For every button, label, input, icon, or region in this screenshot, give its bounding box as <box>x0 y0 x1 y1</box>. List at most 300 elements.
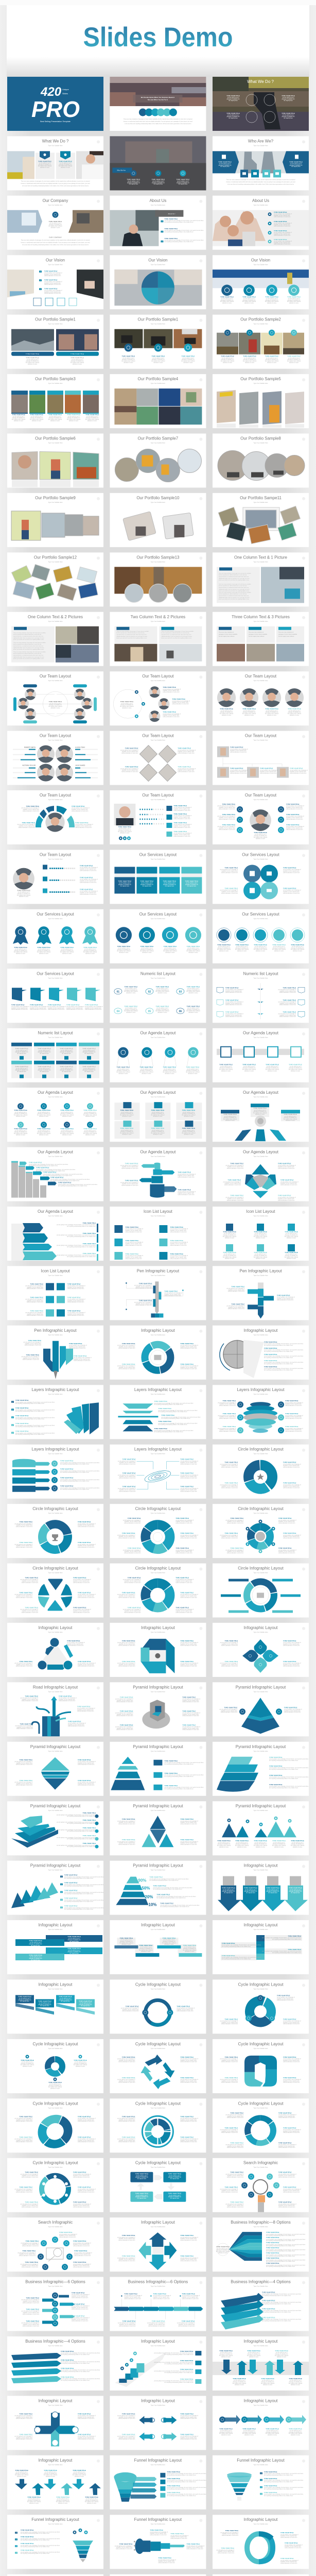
text panels: but the majority have suffered <box>278 636 294 637</box>
title: Our Portfolio Sample3 <box>35 377 76 381</box>
org chart <box>217 747 308 778</box>
labels <box>57 1222 98 1261</box>
labels <box>225 987 296 1018</box>
photos <box>56 626 99 663</box>
title: Pyramid Infographic Layout <box>133 1685 183 1689</box>
title: Circle Infographic Layout <box>238 1447 284 1452</box>
paragraph <box>226 179 295 185</box>
slide: Pyramid diamond <box>7 1742 103 1796</box>
slide: Road Infographic <box>7 1682 103 1736</box>
arrows <box>221 2360 303 2375</box>
slide: Our Portfolio Sample7 <box>110 434 206 487</box>
arrows <box>139 2416 177 2441</box>
title: Layers Infographic Layout <box>31 1387 79 1392</box>
slide: Our Vision checklist <box>7 255 103 309</box>
labels <box>264 1341 304 1371</box>
ring <box>245 1995 275 2026</box>
title: Our Team Layout <box>40 674 72 679</box>
labels <box>220 2112 301 2148</box>
list <box>268 211 292 245</box>
profile <box>114 804 135 840</box>
slide: Our Services columns <box>110 850 206 904</box>
feature icons <box>130 170 186 176</box>
folded cards <box>15 1995 95 2014</box>
arc <box>113 689 145 718</box>
labels <box>21 2292 90 2327</box>
circles <box>243 865 278 900</box>
slide: Our Portfolio Sample13 <box>110 552 206 606</box>
roads <box>32 1696 71 1736</box>
title: Infographic Layout <box>244 1923 278 1927</box>
title: Cycle Infographic Layout <box>238 2042 284 2046</box>
rising blocks <box>115 2351 166 2387</box>
donut <box>42 1524 68 1550</box>
title: Infographic Layout <box>39 1625 73 1630</box>
labels <box>266 2231 306 2267</box>
arrow chain <box>114 2295 203 2319</box>
title: Our Portfolio Sample12 <box>34 555 77 560</box>
icons <box>237 806 284 833</box>
slide: Our Agenda percent arrows <box>7 1207 103 1261</box>
title: Our Vision <box>251 258 270 262</box>
labels <box>219 2350 303 2386</box>
photo <box>114 269 202 306</box>
labels <box>121 2005 195 2012</box>
title: Our Team Layout <box>245 674 277 679</box>
numbered ovals: 03 <box>179 990 182 993</box>
labels <box>126 1282 184 1310</box>
triangles <box>142 1816 173 1847</box>
labels <box>14 2115 96 2143</box>
title: Infographic Layout <box>244 2517 278 2522</box>
box text <box>135 2173 181 2199</box>
title: Business Infographic—6 Options <box>25 2279 85 2284</box>
donut <box>146 1524 170 1549</box>
labels <box>120 748 196 772</box>
portrait <box>13 868 34 897</box>
cover text <box>31 85 80 123</box>
slide: cover 420 Unique Slides PRO <box>7 77 103 131</box>
team photos <box>17 689 93 720</box>
arrows <box>139 1164 177 1192</box>
title: Pyramid Infographic Layout <box>30 1744 81 1749</box>
text panels <box>217 626 304 643</box>
title: Infographic Layout <box>244 2339 278 2344</box>
labels <box>29 1162 98 1187</box>
labels <box>117 1343 198 1370</box>
spiral <box>144 1468 172 1484</box>
checklist <box>260 2471 304 2497</box>
title: Infographic Layout <box>244 1328 278 1333</box>
slide: Infographic band arrows <box>213 2336 309 2391</box>
city photo <box>110 77 206 106</box>
slide: Icon List six <box>213 1207 309 1261</box>
interlock <box>15 1935 102 1960</box>
property cards <box>11 391 99 414</box>
slide: Circle six petals <box>7 1563 103 1618</box>
axis and tags <box>217 983 305 1019</box>
skill bars: VICTORIA TAYLOR <box>22 765 36 767</box>
cards <box>114 1102 202 1139</box>
inner <box>251 2121 270 2140</box>
slide: Our Portfolio Sample2 <box>213 315 309 369</box>
slide: Pyramid percentages <box>110 1861 206 1915</box>
card text <box>15 1048 96 1073</box>
title: Pyramid Infographic Layout <box>236 1804 286 1808</box>
title: Our Agenda Layout <box>243 1150 279 1155</box>
ribbon badges <box>13 926 98 945</box>
buttons: TYPE YOUR TITLE <box>71 353 84 355</box>
tags <box>221 1579 301 1613</box>
slide: Our Team diamonds <box>110 731 206 785</box>
title: Our Services Layout <box>37 912 75 917</box>
labels <box>117 1577 198 1613</box>
title: Cycle Infographic Layout <box>135 1982 181 1987</box>
title: Our Agenda Layout <box>140 1031 176 1036</box>
labels <box>14 1759 96 1786</box>
diamond <box>41 1757 69 1790</box>
pyramid <box>241 1698 279 1734</box>
slide: Icon List centre <box>7 1266 103 1320</box>
title: Layers Infographic Layout <box>31 1447 79 1452</box>
cover text: Unique <box>62 88 69 91</box>
slide: Layers cylinders <box>7 1445 103 1499</box>
labels <box>14 1521 96 1548</box>
quadrant circle <box>142 272 174 304</box>
labels <box>17 2231 92 2268</box>
slide: Infographic globe <box>213 1326 309 1380</box>
title: Funnel Infographic Layout <box>134 2517 182 2522</box>
slide: Who We Are photo <box>110 136 206 190</box>
labels <box>222 1935 302 1960</box>
photos <box>114 329 202 348</box>
ring <box>26 2055 82 2081</box>
stack <box>150 1163 164 1198</box>
title: Who Are We? <box>248 139 274 143</box>
slide: One Column Text & 1 Picture <box>213 552 309 606</box>
title: Infographic Layout <box>141 2398 175 2403</box>
title: About Us <box>149 198 166 203</box>
slide: Our Portfolio Sample12 <box>7 552 103 606</box>
title: Infographic Layout <box>141 2220 175 2225</box>
pyramid <box>116 1877 148 1905</box>
slide: Pyramid isometric <box>110 1682 206 1736</box>
title: Numeric list Layout <box>38 1031 73 1036</box>
tab text <box>119 1937 197 1953</box>
numbered ovals: 06 <box>179 1010 182 1013</box>
slide: Our Portfolio Sample3 <box>7 374 103 428</box>
title: Icon List Layout <box>41 1268 70 1273</box>
title: Infographic Layout <box>141 1923 175 1927</box>
title: Our Team Layout <box>142 793 174 798</box>
slide: Our Services four circles <box>213 850 309 904</box>
labels <box>14 1577 96 1613</box>
list <box>160 2471 206 2498</box>
title: Pyramid Infographic Layout <box>133 1744 183 1749</box>
slide: Two Column Text & 2 Pictures <box>110 612 206 666</box>
labels <box>11 1004 103 1010</box>
circular photos <box>218 450 305 480</box>
text panel <box>11 626 55 663</box>
percentages <box>138 1878 156 1907</box>
title: Our Portfolio Sample2 <box>240 317 281 322</box>
photo <box>261 567 304 603</box>
title: Cycle Infographic Layout <box>135 2161 181 2165</box>
cover text: 420 <box>40 85 62 99</box>
title: Our Services Layout <box>139 912 177 917</box>
arrows <box>11 1161 57 1185</box>
tag and list <box>155 210 204 243</box>
slide: Circle six-section ring <box>110 1563 206 1618</box>
title: Our Team Layout <box>245 734 277 738</box>
title: Our Services Layout <box>242 912 280 917</box>
slide: Circle six sections <box>110 1504 206 1558</box>
labels <box>117 2115 198 2143</box>
pen <box>248 1282 274 1318</box>
title: Two Column Text & 2 Pictures <box>131 615 185 619</box>
title: Pen Infographic Layout <box>137 1268 180 1273</box>
slide: Pen Infographic one <box>110 1266 206 1320</box>
slide: Funnel percent <box>213 2455 309 2510</box>
title: Pyramid Infographic Layout <box>30 1863 81 1868</box>
slide: Cycle four arrows <box>110 2039 206 2093</box>
title: Circle Infographic Layout <box>135 1506 181 1511</box>
text panels: passages of Lorem Ipsum available <box>249 634 268 635</box>
title: Our Portfolio Sample7 <box>138 436 179 441</box>
photo mosaic <box>114 388 202 425</box>
slide: Search Infographic two <box>7 2217 103 2272</box>
title: Circle Infographic Layout <box>238 1506 284 1511</box>
buttons: TYPE YOUR TITLE <box>26 353 39 355</box>
title: Pen Infographic Layout <box>239 1268 282 1273</box>
title: Our Portfolio Sample13 <box>136 555 180 560</box>
title: Cycle Infographic Layout <box>135 2042 181 2046</box>
slide: Our Team portraits <box>213 671 309 725</box>
slide: Infographic plus shape <box>7 2396 103 2450</box>
text panels: There are many variations of <box>278 632 294 633</box>
tabs <box>114 1938 202 1957</box>
labels <box>118 1459 198 1492</box>
title: Numeric list Layout <box>243 971 278 976</box>
reflections <box>12 480 99 487</box>
title: Funnel Infographic Layout <box>31 2517 80 2522</box>
labels <box>118 2293 200 2327</box>
text panels: passages of Lorem Ipsum available <box>278 634 297 635</box>
labels <box>120 1163 196 1195</box>
slide: Pyramid triangles <box>110 1801 206 1855</box>
callouts <box>219 1706 302 1715</box>
text panel <box>217 567 260 603</box>
checklist <box>11 1399 55 1435</box>
paragraph <box>21 180 90 187</box>
captions <box>221 355 301 363</box>
labels <box>217 1840 305 1848</box>
arrows <box>141 2055 174 2089</box>
labels <box>115 1696 200 1731</box>
squares <box>221 1047 301 1057</box>
slide: Infographic hex options <box>7 2574 103 2576</box>
column text <box>118 880 198 887</box>
slide: Pyramid five peaks <box>213 1801 309 1855</box>
cross arrows <box>138 2232 177 2270</box>
slide: Layers hourglass <box>110 1385 206 1439</box>
text panels: There are many variations of <box>219 632 234 633</box>
labels <box>21 1340 92 1362</box>
slide: Business 4 Options slanted <box>213 2277 309 2331</box>
squares <box>114 1225 167 1260</box>
photos and cards <box>7 151 103 179</box>
funnel <box>73 2529 93 2562</box>
slide: Our Agenda band <box>213 1028 309 1082</box>
slide: Our Team hub <box>7 671 103 725</box>
labels <box>117 2056 198 2083</box>
band <box>217 1049 304 1055</box>
slide: Infographic interlock <box>7 1920 103 1974</box>
labels <box>60 1460 100 1490</box>
labels <box>219 1064 303 1072</box>
photo details <box>227 471 284 477</box>
title: Our Services Layout <box>139 852 177 857</box>
magnifier <box>253 2180 268 2212</box>
triangle <box>37 1638 73 1670</box>
title: Our Portfolio Sample9 <box>35 496 76 500</box>
target and arrows <box>235 1115 286 1141</box>
slide: Business 6 Options arrow chain <box>110 2277 206 2331</box>
tag and list: About Us ! <box>168 213 175 215</box>
photo tones <box>213 77 309 131</box>
slide: Cycle three arrows <box>213 1979 309 2033</box>
columns <box>114 867 202 893</box>
slide: Cycle rounded square <box>213 2039 309 2093</box>
labels <box>117 1818 198 1845</box>
slide: Our Services ribbons <box>7 909 103 963</box>
slide: Pyramid isometric steps <box>7 1801 103 1855</box>
captions <box>220 708 302 716</box>
hourglass <box>118 1403 158 1431</box>
card text <box>120 1109 196 1136</box>
title: Our Team Layout <box>142 674 174 679</box>
slide: Numeric list cards <box>7 1028 103 1082</box>
title: Infographic Layout <box>39 1982 73 1987</box>
title: Circle Infographic Layout <box>135 1566 181 1570</box>
diamonds <box>139 745 176 782</box>
numbered ovals: 01 <box>117 990 119 993</box>
slide: Our Team skills <box>7 731 103 785</box>
star cube <box>245 1164 276 1198</box>
slide: Infographic ribbon ring <box>213 2515 309 2569</box>
slide: Funnel layered <box>110 2455 206 2510</box>
photo collage <box>218 506 300 544</box>
title: What We Do ? <box>247 79 274 84</box>
labels <box>125 1226 188 1260</box>
title: What We Do ? <box>42 139 69 143</box>
name tags <box>13 684 97 723</box>
title: Our Team Layout <box>142 734 174 738</box>
title: Cycle Infographic Layout <box>238 1982 284 1987</box>
labels <box>220 1640 301 1667</box>
title: Pen Infographic Layout <box>34 1328 77 1333</box>
title: Cycle Infographic Layout <box>135 2101 181 2106</box>
book fan <box>64 1402 99 1434</box>
slide: Our Agenda target arrows <box>213 1088 309 1142</box>
checklist <box>39 270 62 294</box>
percentages: 20% <box>145 1895 153 1900</box>
connectors <box>136 1462 179 1489</box>
title: Cycle Infographic Layout <box>32 2042 78 2046</box>
slide: Infographic percent tabs <box>110 1920 206 1974</box>
slide: Infographic four leaves <box>213 1623 309 1677</box>
slide: Funnel icons <box>7 2515 103 2569</box>
title: Infographic Layout <box>39 1923 73 1927</box>
slide: Infographic cross arrows <box>110 2217 206 2272</box>
slide: Search Infographic one <box>213 2158 309 2212</box>
labels <box>14 946 97 954</box>
photos <box>7 269 103 299</box>
slide: Cycle ring two <box>110 1979 206 2033</box>
title: Our Portfolio Sample1 <box>138 317 179 322</box>
title: Infographic Layout <box>39 2458 73 2463</box>
title: Funnel Infographic Layout <box>134 2458 182 2463</box>
numbered ovals: 05 <box>148 1010 151 1013</box>
slide: Our Portfolio Sample5 <box>213 374 309 428</box>
labels <box>220 2172 301 2208</box>
slide: Our Portfolio Sample8 <box>213 434 309 487</box>
portrait <box>250 809 271 840</box>
labels <box>124 986 200 1013</box>
labels <box>117 2234 198 2262</box>
slide: Pyramid mountains <box>7 1861 104 1915</box>
title: Our Portfolio Sample4 <box>138 377 179 381</box>
slide: Cycle ring icons <box>7 2039 103 2093</box>
title: Numeric list Layout <box>141 971 176 976</box>
cylinders <box>12 1459 36 1492</box>
circular photos <box>125 584 191 602</box>
captions <box>26 357 84 365</box>
dial <box>145 1345 170 1370</box>
title: Search Infographic <box>243 2161 278 2165</box>
ring <box>142 2000 173 2025</box>
ring <box>247 2534 273 2562</box>
title: Business Infographic—4 Options <box>25 2339 85 2344</box>
slide: Cycle four boxes <box>110 2158 206 2212</box>
title: Our Services Layout <box>37 971 75 976</box>
slide: Circle donut three <box>213 1445 309 1499</box>
labels <box>116 1066 200 1074</box>
stack <box>111 1757 145 1790</box>
labels <box>14 1109 97 1136</box>
feature text <box>127 178 189 185</box>
icons and labels <box>218 1400 303 1433</box>
plus <box>34 2412 78 2446</box>
paragraph: OUR COMPANY <box>49 236 62 239</box>
title: Infographic Layout <box>244 2398 278 2403</box>
title: Our Agenda Layout <box>243 1090 279 1095</box>
slide: Infographic options column <box>213 1920 309 1974</box>
tilted photos <box>217 390 304 428</box>
slide: Our Vision sky <box>213 255 309 309</box>
title: Our Team Layout <box>245 793 277 798</box>
portraits <box>217 688 304 707</box>
spine <box>42 2293 75 2327</box>
labels <box>21 2059 87 2090</box>
photos <box>217 333 304 354</box>
arrows <box>11 1223 57 1261</box>
labels <box>226 1285 295 1310</box>
title: Pyramid Infographic Layout <box>30 1804 81 1808</box>
slanted bars <box>221 2293 264 2330</box>
slide: Infographic center cube <box>110 2574 206 2576</box>
labels <box>262 2292 302 2321</box>
